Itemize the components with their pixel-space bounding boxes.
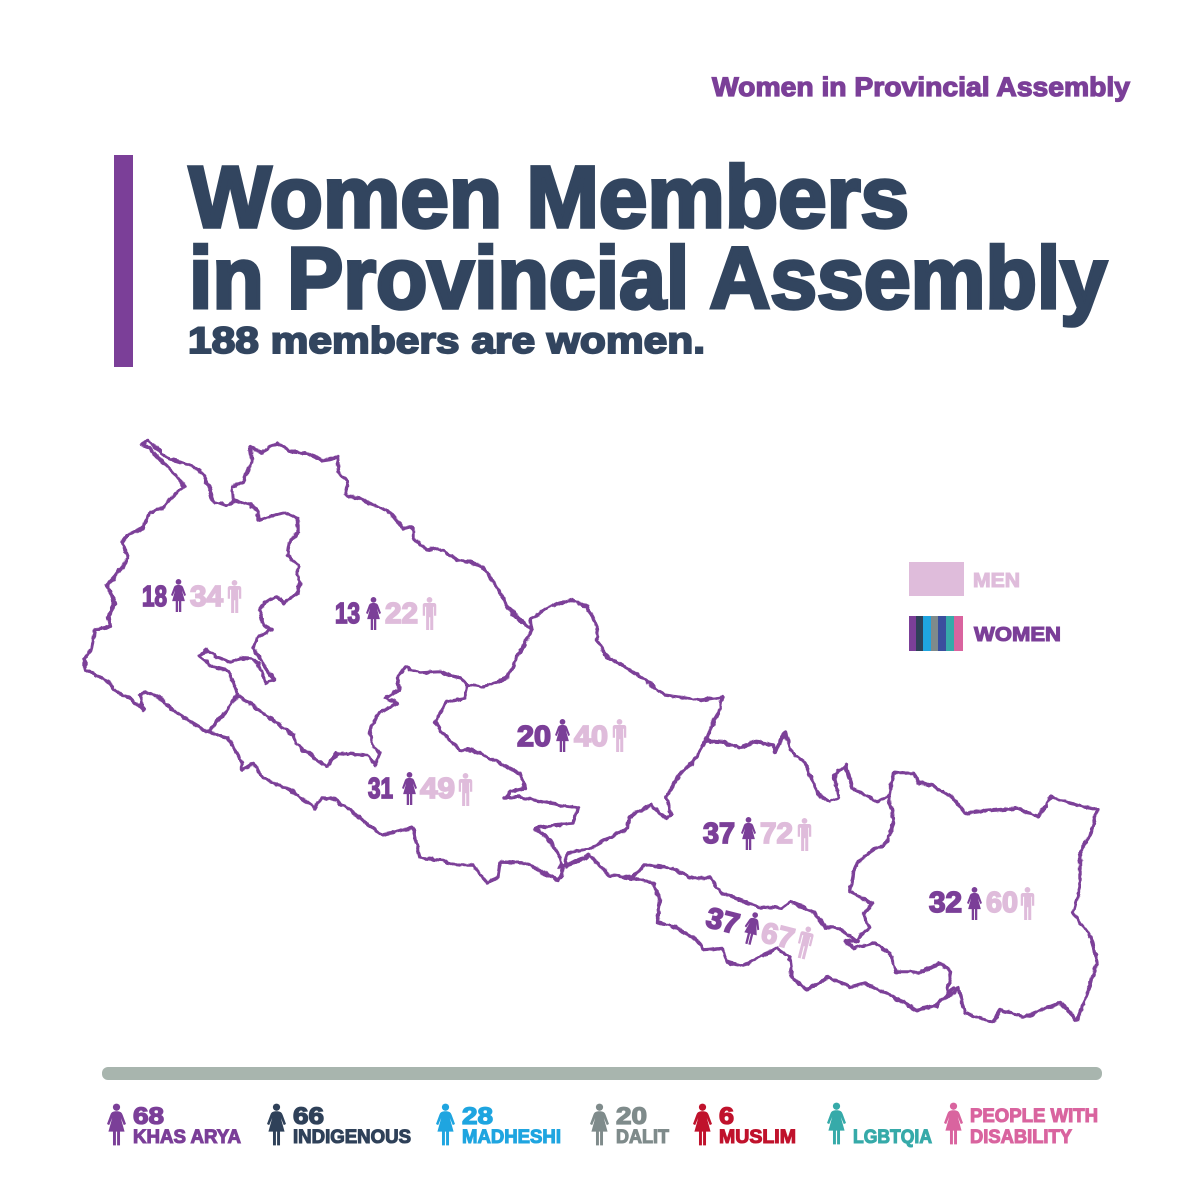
province stat: 32 women 60 men: 60: [986, 887, 1018, 919]
province stat: 20 women 40 men: [517, 719, 626, 753]
category: Khas Arya: [107, 1103, 241, 1148]
province: Sudurpashchim outline: [85, 440, 300, 732]
province stat: 32 women 60 men: [929, 887, 1034, 920]
category: Muslim: 6: [719, 1103, 734, 1130]
province: Bagmati outline: [530, 600, 722, 867]
category: Dalit: DALIT: [616, 1126, 669, 1148]
legend: women: WOMEN: [974, 624, 1061, 646]
legend: women: [909, 616, 1061, 651]
category: LGBTQIA: [827, 1103, 932, 1148]
province stat: 31 women 49 men: 31: [368, 773, 393, 805]
category: Muslim: [693, 1103, 796, 1148]
province: Koshi outline: [889, 773, 1097, 1022]
category: Muslim: MUSLIM: [719, 1126, 796, 1148]
province stat: 37 women 67 men, rotated: 37: [703, 902, 743, 941]
province stat: 31 women 49 men: 49: [420, 773, 455, 805]
category: People with disability: PEOPLE WITH: [970, 1105, 1098, 1127]
category: Dalit: 20: [616, 1103, 647, 1130]
category: LGBTQIA: LGBTQIA: [853, 1126, 932, 1148]
category: Khas Arya: 68: [133, 1103, 164, 1130]
category: Madheshi: 28: [462, 1103, 493, 1130]
header label: Women in Provincial Assembly: [712, 72, 1130, 102]
province: Lumbini outline: [208, 685, 578, 883]
map of Nepal provinces: [85, 440, 1097, 1022]
province stat: 37 women 72 men: 72: [760, 818, 793, 850]
title: Women Members: [189, 149, 909, 246]
category: Madheshi: MADHESHI: [462, 1126, 561, 1148]
category: People with disability: [944, 1103, 1098, 1148]
category: Indigenous: 66: [293, 1103, 324, 1130]
title: in Provincial Assembly: [189, 230, 1107, 327]
category: Indigenous: [267, 1103, 411, 1148]
province stat: 18 women 34 men: 34: [190, 581, 223, 613]
title: [189, 149, 1107, 327]
province stat: 13 women 22 men: 13: [335, 598, 360, 630]
province stat: 13 women 22 men: [335, 597, 436, 630]
category: Madheshi: [436, 1103, 561, 1148]
accent bar: [114, 155, 133, 367]
category: Dalit: [590, 1103, 669, 1148]
province stat: 18 women 34 men: 18: [142, 581, 167, 613]
province stat: 37 women 67 men, rotated: 67: [758, 917, 798, 956]
province stat: 20 women 40 men: 20: [517, 721, 551, 753]
legend: men: [909, 562, 1020, 596]
category: People with disability: DISABILITY: [970, 1126, 1072, 1148]
province: Madhesh outline: [589, 855, 954, 1010]
divider bar: [102, 1067, 1102, 1080]
subtitle: 188 members are women.: [188, 320, 705, 361]
province: Gandaki east outline: [706, 733, 894, 940]
legend: men: MEN: [973, 570, 1020, 592]
province stat: 37 women 72 men: 37: [703, 818, 735, 850]
province stat: 20 women 40 men: 40: [574, 721, 608, 753]
province stat: 37 women 67 men, rotated: [703, 901, 816, 960]
province stat: 31 women 49 men: [368, 772, 472, 806]
province stat: 37 women 72 men: [703, 817, 811, 851]
province: Karnali outline: [232, 443, 532, 767]
province stat: 32 women 60 men: 32: [929, 887, 962, 919]
category: Khas Arya: KHAS ARYA: [133, 1126, 241, 1148]
province stat: 18 women 34 men: [142, 579, 241, 613]
province stat: 13 women 22 men: 22: [385, 598, 418, 630]
category: Indigenous: INDIGENOUS: [293, 1126, 411, 1148]
